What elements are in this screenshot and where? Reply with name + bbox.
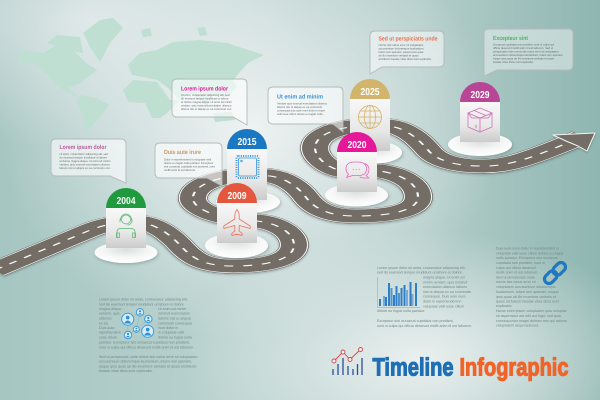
pin 2029: 2029: [470, 90, 490, 101]
text block with link icon: cupidatat non proident, sunt in: [496, 261, 545, 265]
text block with bar chart: minim veniam, quis nostrud: [423, 280, 467, 284]
text block with network icon: sunt in culpa qui officia deserunt mollit anim id est laborum.: [99, 345, 194, 349]
text block with network icon: magna aliqua.: [99, 307, 122, 311]
pin 2004: [94, 188, 158, 263]
callout 2004: veniam, quis nostrud exercitation ullamco: [60, 164, 110, 166]
callout 2004: et dolore magna aliqua. Ut enim ad minim: [60, 160, 111, 163]
callout 2029: Excepteur sint: [493, 35, 528, 42]
text block with bar chart: Excepteur sint occaecat cupidatat non proident,: [377, 319, 454, 323]
callout 2020: laboris nisi ut aliquip ex ea commodo: [277, 106, 323, 109]
pin 2009: 2009: [228, 191, 247, 202]
text block with network icon: nostrud exercitation: [158, 312, 190, 316]
text block with link icon: nulla pariatur. Excepteur sint occaecat: [496, 256, 558, 260]
text block with link icon: quasi architecto beatae vitae dicta sunt: [496, 300, 559, 304]
callout 2009: Dolor in reprehenderit in voluptate velit: [164, 158, 211, 162]
callout 2025: Sed ut perspiciatis unde: [378, 36, 438, 42]
callout 2020: consequat duis aute irure dolor in repre: [277, 110, 325, 112]
text block with link icon: explicabo.: [496, 304, 512, 308]
text block with link icon: Duis aute irure dolor in reprehenderit in: [496, 246, 559, 250]
callout 2020: velit esse cillum dolore eu fugiat nulla.: [277, 113, 324, 116]
pin 2025: [348, 79, 402, 164]
callout 2009: mollit anim id est laborum.: [164, 169, 196, 172]
text block with network icon: irure dolor in: [158, 326, 178, 330]
callout 2015: veniam, quis nostrud exercitation ullamco: [181, 104, 232, 108]
text block with link icon: omnis iste natus error sit: [496, 280, 536, 284]
text block with link icon: Sed ut perspiciatis unde: [496, 276, 535, 280]
road with arrow: [0, 125, 595, 270]
text block with network icon: Ut enim ad minim: [158, 307, 186, 311]
text block with bar chart: nisi ut aliquip ex ea commodo: [423, 290, 471, 294]
text block with bar chart: sunt in culpa qui officia deserunt mollit anim id est laborum.: [377, 324, 472, 328]
pin 2004: 2004: [116, 196, 136, 207]
callout 2020: [268, 87, 343, 132]
text block with bar chart: sed do eiusmod tempor incididunt ut labore et dolore: [377, 271, 462, 275]
text block with bar chart: consequat. Duis aute irure: [423, 295, 466, 299]
text block with link icon: mollit anim id est laborum.: [496, 270, 538, 274]
text block with bar chart: exercitation ullamco laboris: [423, 285, 467, 289]
text block with network icon: laboris nisi ut aliquip: [158, 317, 191, 321]
callout 2009: [155, 143, 222, 186]
text block with network icon: veniam, quis: [99, 312, 120, 316]
text block with network icon: reprehenderit: [99, 331, 121, 335]
callout 2004: [51, 139, 126, 183]
text block with network icon: beatae vitae dicta sunt explicabo.: [99, 369, 153, 373]
text block with network icon: accusantium doloremque laudantium, totam rem aperiam,: [99, 360, 192, 364]
callout 2029: beatae vitae dicta sunt explicabo.: [493, 61, 534, 64]
pin 2025: 2025: [360, 87, 380, 98]
text block with bar chart: voluptate velit esse cillum: [423, 304, 464, 308]
pin 2015: 2015: [238, 137, 257, 148]
icon: title chart logo: [332, 348, 362, 375]
title: Infographic: [460, 354, 569, 382]
text block with network icon: ullamco: [99, 317, 112, 321]
text block with network icon: ex ea: [99, 321, 109, 325]
callout 2004: do eiusmod tempor incididunt ut labore: [60, 156, 107, 160]
text block with network icon: dolore eu fugiat nulla: [158, 336, 193, 340]
callout 2025: [370, 31, 444, 74]
callout 2029: eaque ipsa quae ab illo inventore veritatis et quasi: [493, 58, 554, 60]
text block with link icon: sit aspernatur aut odit aut fugit, sed quia: [496, 314, 562, 318]
text block with network icon: esse cillum: [99, 336, 117, 340]
pin 2020: [325, 132, 388, 206]
text block with link icon: laudantium, totam rem aperiam, eaque: [496, 290, 559, 294]
title: [372, 354, 569, 382]
callout 2015: Lorem ipsum dolor: [181, 86, 229, 92]
callout 2029: Occaecat cupidatat non proident, sunt in culpa qui: [493, 44, 554, 46]
title: Timeline: [372, 354, 454, 382]
bar chart: [378, 277, 420, 308]
text block with link icon: [496, 246, 567, 328]
callout 2025: accusantium doloremque laudantium,: [378, 48, 424, 50]
callout 2025: ab illo inventore veritatis et quasi: [378, 54, 419, 58]
callout 2025: totam rem aperiam, eaque ipsa quae: [378, 51, 424, 54]
text block with bar chart: magna aliqua. Ut enim ad: [423, 276, 464, 280]
callout 2029: perspiciatis unde omnis iste natus error sit voluptatem: [493, 50, 559, 54]
text block with bar chart: dolor in reprehenderit in: [423, 300, 461, 304]
callout 2029: accusantium doloremque laudantium, totam rem aperiam,: [493, 54, 564, 57]
text block with network icon: in voluptate velit: [158, 331, 184, 335]
text block with network icon: Duis aute: [99, 326, 114, 330]
text block with network icon: commodo consequat.: [158, 321, 193, 325]
callout 2009: dolore eu fugiat nulla pariatur. Excepteur: [164, 162, 213, 165]
callout 2015: laboris nisi ut aliquip ex ea commodo con.: [181, 108, 232, 111]
pin 2029: [448, 82, 512, 156]
callout 2009: sint occaecat cupidatat non proident, sunt: [164, 166, 215, 168]
callout 2025: Omnis iste natus error sit voluptatem: [378, 44, 424, 47]
text block with network icon: eaque ipsa quae ab illo inventore veritatis et quasi architecto: [99, 364, 197, 368]
text block with link icon: voluptatem accusantium doloremque: [496, 285, 556, 289]
callout 2029: officia deserunt mollit anim id est laborum. Sed ut: [493, 47, 553, 50]
callout 2029: [484, 29, 573, 76]
callout 2004: Ut enim, consectetur adipiscing elit, sed: [60, 153, 108, 156]
text block with bar chart: Lorem ipsum dolor sit amet, consectetur adipiscing elit,: [377, 266, 466, 270]
text block with network icon: Lorem ipsum dolor sit amet, consectetur adipiscing elit,: [99, 298, 188, 302]
text block with bar chart: dolore eu fugiat nulla pariatur.: [377, 309, 425, 313]
text block with network icon: sed do eiusmod tempor incididunt ut labore et dolore: [99, 302, 184, 306]
text block with link icon: voluptate velit esse cillum dolore eu fugiat: [496, 252, 563, 256]
world map: [18, 18, 264, 134]
icon: people network: [122, 309, 154, 339]
text block with network icon: pariatur. Excepteur sint occaecat cupidatat non proident,: [99, 340, 190, 344]
text block with link icon: culpa qui officia deserunt: [496, 266, 536, 270]
callout 2020: Ut enim ad minim: [277, 94, 323, 100]
callout 2015: et dolore magna aliqua. Ut enim ad minim: [181, 101, 233, 104]
text block with link icon: ipsa quae ab illo inventore veritatis et: [496, 295, 556, 299]
text block with bar chart: [377, 266, 472, 328]
callout 2015: Ut enim, consectetur adipiscing elit, sed: [181, 94, 230, 97]
callout 2004: laboris nisi ut aliquip ex ea commodo con.: [60, 167, 111, 170]
pin 2009: [205, 183, 268, 258]
text block with link icon: consequuntur magni dolores eos qui ratione: [496, 319, 567, 323]
text block with network icon: Sed ut perspiciatis unde omnis iste natus error sit voluptatem: [99, 355, 197, 359]
callout 2025: architecto beatae vitae dicta sunt explicabo.: [378, 58, 432, 61]
pin 2015: [216, 129, 280, 213]
callout 2009: Duis aute irure: [164, 149, 202, 156]
callout 2004: Lorem ipsum dolor: [60, 144, 107, 151]
pin 2020: 2020: [348, 140, 367, 151]
callout 2015: [172, 79, 247, 125]
callout 2015: do eiusmod tempor incididunt ut labore: [181, 98, 229, 100]
icon: chain link: [543, 261, 567, 285]
callout 2020: Veniam quis nostrud exercitation ullamco: [277, 102, 327, 106]
text block with link icon: Nemo enim ipsam voluptatem quia voluptas: [496, 309, 567, 313]
text block with network icon: [99, 298, 197, 373]
text block with link icon: voluptatem sequi nesciunt.: [496, 324, 539, 328]
